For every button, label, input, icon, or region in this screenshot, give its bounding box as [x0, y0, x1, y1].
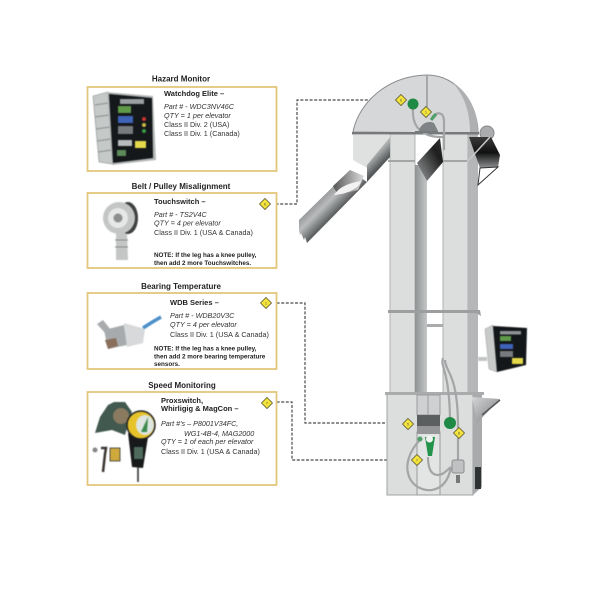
text: watchdog elite: Class II Div. 2 (USA) [164, 120, 229, 129]
bucket elevator [299, 75, 500, 495]
knee section right [467, 126, 500, 185]
heading: belt pulley misalignment: Belt / Pulley Misalignment [132, 182, 231, 191]
callout diamonds: 1 [425, 110, 428, 114]
elevator legs [388, 130, 481, 395]
callout diamonds [260, 94, 464, 466]
text: touchswitch [154, 197, 257, 267]
text: watchdog elite: QTY = 1 per elevator [164, 111, 231, 120]
text: WDB series: WDB Series – [170, 298, 219, 307]
callout diamonds: 6 [264, 202, 267, 206]
text: touchswitch: NOTE: If the leg has a knee pulley, [154, 252, 257, 259]
text: WDB series: NOTE: If the leg has a knee pulley, [154, 346, 257, 352]
panel frame: hazard monitor [88, 87, 276, 171]
text: proxswitch: Whirligig & MagCon – [161, 404, 238, 413]
panel frame: speed monitoring [88, 392, 276, 485]
text: proxswitch: Part #'s – P8001V34FC, [161, 419, 238, 428]
heading: bearing temperature: Bearing Temperature [141, 282, 221, 291]
text: WDB series: Class II Div. 1 (USA & Canada) [170, 330, 269, 339]
text: WDB series: QTY = 4 per elevator [170, 320, 237, 329]
text: proxswitch: WG1-4B-4, MAG2000 [184, 429, 254, 438]
text: touchswitch: Part # - TS2V4C [154, 210, 208, 219]
green sensors [408, 98, 456, 456]
text: proxswitch: Class II Div. 1 (USA & Canada) [161, 447, 260, 456]
text: watchdog elite [164, 89, 240, 138]
icon: proxswitch and whirligig [92, 402, 155, 482]
wall monitor on elevator [478, 325, 527, 372]
text: proxswitch [161, 396, 260, 456]
callout diamonds: 8 [458, 430, 461, 436]
icon: touchswitch [103, 202, 138, 260]
text: proxswitch: QTY = 1 of each per elevator [161, 437, 254, 446]
text: WDB series: then add 2 more bearing temperature [154, 354, 266, 360]
text: watchdog elite: Class II Div. 1 (Canada) [164, 129, 240, 138]
text: touchswitch: Class II Div. 1 (USA & Canada) [154, 228, 253, 237]
discharge spout [299, 137, 443, 243]
text: watchdog elite: Part # - WDC3NV46C [164, 102, 235, 111]
text: WDB series: Part # - WDB20V3C [170, 311, 235, 320]
callout diamonds: 7 [416, 458, 419, 462]
panel: speed monitoring [88, 381, 276, 485]
heading: hazard monitor: Hazard Monitor [152, 74, 210, 84]
panel: bearing temperature [88, 282, 276, 369]
icon: WDB sensor [97, 317, 161, 349]
leader lines [271, 100, 426, 460]
text: proxswitch: Proxswitch, [161, 396, 203, 405]
boot section [385, 392, 500, 495]
text: WDB series [154, 298, 269, 368]
text: touchswitch: then add 2 more Touchswitches. [154, 260, 251, 267]
panel frame: bearing temperature [88, 293, 276, 369]
panel frame: belt pulley misalignment [88, 193, 276, 268]
text: WDB series: sensors. [154, 361, 180, 368]
text: touchswitch: QTY = 4 per elevator [154, 218, 221, 228]
conduits [407, 108, 464, 490]
callout diamonds: 6 [400, 98, 403, 102]
text: touchswitch: Touchswitch – [154, 197, 206, 206]
text: watchdog elite: Watchdog Elite – [164, 89, 224, 98]
panel: belt pulley misalignment [88, 182, 276, 268]
heading: speed monitoring: Speed Monitoring [148, 381, 216, 390]
icon: watchdog elite monitor [93, 92, 156, 165]
callout diamonds: 7 [266, 400, 269, 406]
panel: hazard monitor [88, 74, 276, 171]
callout diamonds: 1 [265, 300, 268, 306]
callout diamonds: 5 [407, 422, 410, 426]
elevator head [352, 75, 479, 168]
